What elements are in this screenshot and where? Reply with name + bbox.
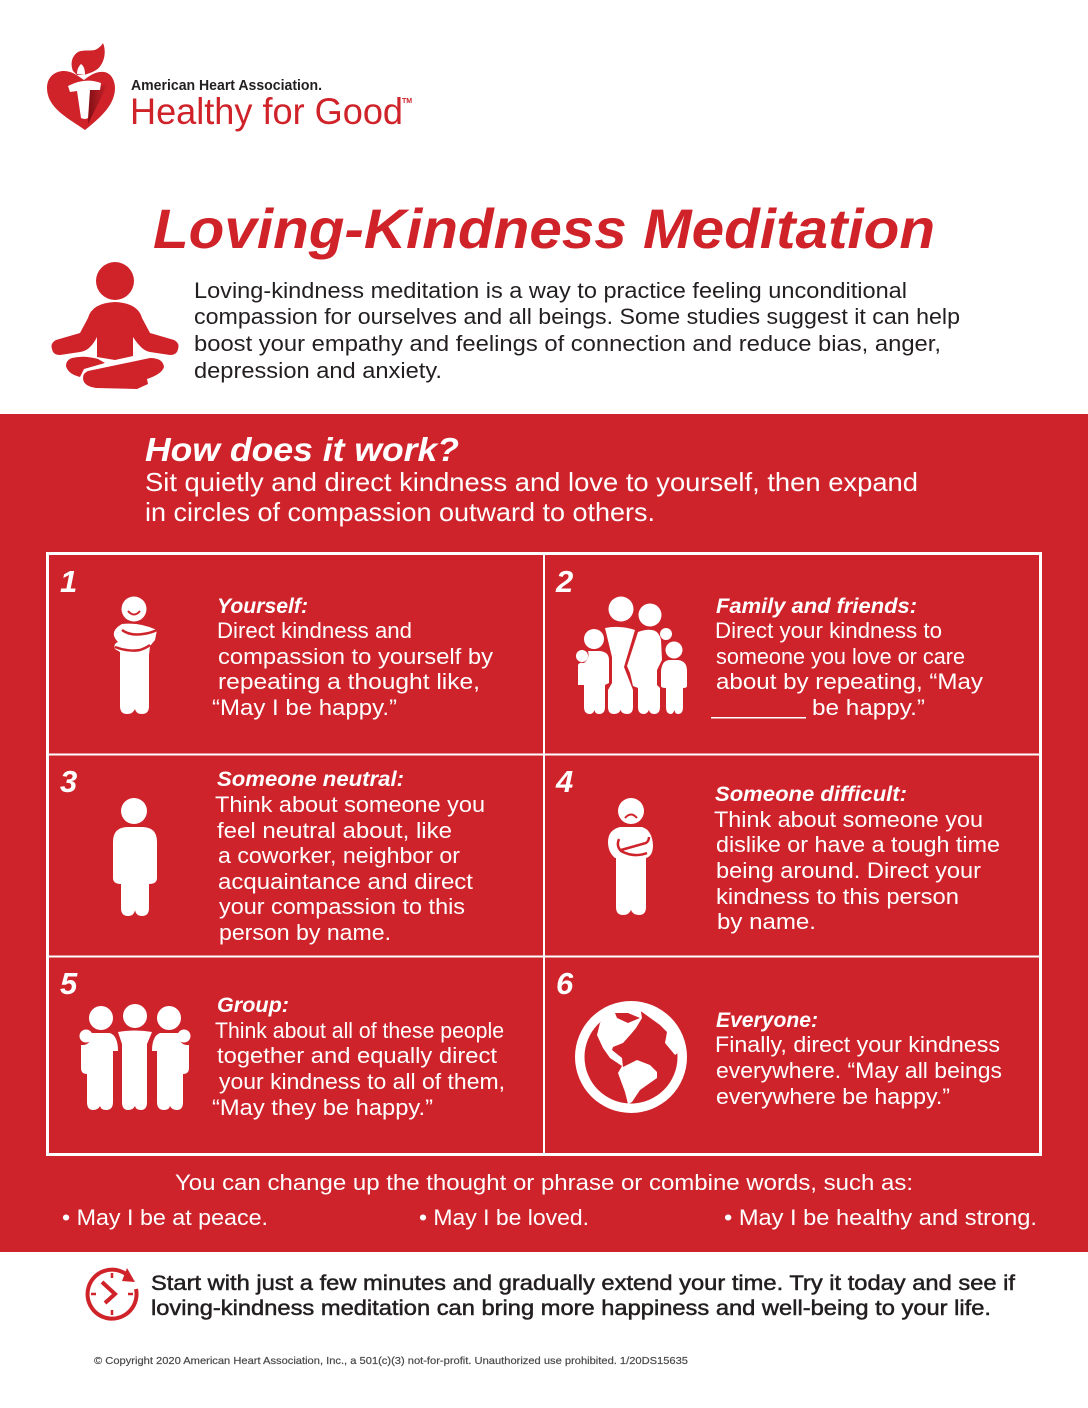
icon: group of three [80, 1004, 190, 1110]
closing text: loving-kindness meditation can bring more happiness and well-being to your life. [151, 1297, 991, 1320]
text: someone neutral: your compassion to this [219, 894, 465, 919]
text: everyone: Finally, direct your kindness [715, 1032, 1000, 1057]
text: someone difficult: by name. [717, 909, 816, 934]
subheading text: in circles of compassion outward to others. [145, 497, 655, 527]
text: change up the phrase: You can change up the thought or phrase or combine words, such as: [175, 1170, 913, 1195]
text: group: “May they be happy.” [212, 1095, 433, 1120]
closing text: Start with just a few minutes and gradually extend your time. Try it today and see if [151, 1272, 1015, 1295]
cell 1: yourself [60, 564, 493, 720]
text: Healthy for Good: Healthy for Good [130, 91, 403, 132]
text: family and friends: Direct your kindness to [715, 618, 942, 643]
intro text: depression and anxiety. [194, 358, 442, 383]
text: someone neutral: feel neutral about, like [217, 818, 452, 843]
icon: family [576, 596, 687, 714]
text: group: together and equally direct [217, 1043, 497, 1068]
text: trademark: TM [402, 98, 412, 105]
text: family and friends [711, 595, 983, 720]
text: someone difficult: dislike or have a tough time [716, 832, 1000, 857]
text: someone neutral: a coworker, neighbor or [218, 843, 460, 868]
title: Loving-Kindness Meditation [153, 197, 935, 260]
cell 3: someone neutral: 3 [60, 764, 77, 799]
cell 6: everyone [556, 966, 1002, 1113]
cell 1: yourself: 1 [60, 564, 77, 599]
text: yourself: compassion to yourself by [218, 644, 493, 669]
logo: American Heart Association Healthy for Good [47, 43, 412, 132]
text: American Heart Association: American Heart Association. [131, 78, 322, 94]
intro text: Loving-kindness meditation is a way to practice feeling unconditional [194, 278, 907, 303]
heading: how does it work: How does it work? [145, 431, 459, 468]
intro text [194, 278, 960, 383]
text: someone difficult: kindness to this person [716, 884, 959, 909]
cell 6: everyone: 6 [556, 966, 574, 1001]
text: everyone: everywhere. “May all beings [716, 1058, 1002, 1083]
icon: person with crossed arms [608, 798, 653, 915]
cell 3: someone neutral [60, 764, 485, 945]
icon: meditating person [52, 262, 178, 389]
text: someone difficult: Someone difficult: [715, 783, 907, 806]
icon: globe [575, 1001, 687, 1113]
text: someone difficult [714, 783, 1000, 934]
text: yourself: repeating a thought like, [218, 669, 480, 694]
subheading text [145, 467, 918, 527]
text: yourself: Yourself: [217, 595, 308, 618]
text: yourself: Direct kindness and [217, 618, 412, 643]
text: someone neutral: acquaintance and direct [218, 869, 473, 894]
text: someone neutral: person by name. [219, 920, 391, 945]
text: someone neutral: Think about someone you [215, 792, 485, 817]
icon: person hugging self [114, 596, 157, 714]
text: group: Group: [217, 994, 289, 1017]
text: someone difficult: Think about someone you [714, 807, 983, 832]
intro text: boost your empathy and feelings of connection and reduce bias, anger, [194, 331, 941, 356]
bullet: at peace: • May I be at peace. [62, 1205, 268, 1230]
icon: heart and torch [47, 43, 115, 130]
cell 4: someone difficult: 4 [555, 764, 573, 799]
text: group: your kindness to all of them, [219, 1069, 505, 1094]
text: family and friends: be happy.” [812, 695, 925, 720]
icon: neutral person [113, 798, 157, 916]
cell 2: family and friends [555, 564, 983, 720]
text: family and friends: about by repeating, “May [716, 669, 983, 694]
bullet: healthy and strong: • May I be healthy and strong. [724, 1205, 1037, 1230]
text: someone difficult: being around. Direct your [716, 858, 981, 883]
cell 4: someone difficult [555, 764, 1000, 934]
text: yourself: “May I be happy.” [212, 695, 397, 720]
text: family and friends: Family and friends: [716, 595, 917, 618]
icon: clock [88, 1268, 137, 1319]
text: group: Think about all of these people [215, 1018, 504, 1043]
text: group [212, 994, 505, 1120]
bullet: loved: • May I be loved. [419, 1205, 589, 1230]
subheading text: Sit quietly and direct kindness and love to yourself, then expand [145, 467, 918, 497]
text: everyone: everywhere be happy.” [716, 1084, 950, 1109]
cell 5: group: 5 [60, 966, 78, 1001]
text: everyone: Everyone: [716, 1009, 818, 1032]
cell 2: family and friends: 2 [555, 564, 573, 599]
panel: how does it work [0, 414, 1088, 1252]
text: family and friends: someone you love or care [716, 644, 965, 669]
text: yourself [212, 595, 493, 720]
copyright: © Copyright 2020 American Heart Association, Inc., a 501(c)(3) not-for-profit. Unauthorized use prohibited. 1/20DS15635 [94, 1355, 688, 1367]
cell 5: group [60, 966, 505, 1120]
text: everyone [715, 1009, 1002, 1109]
closing text [151, 1272, 1015, 1320]
text: someone neutral [215, 768, 485, 945]
intro text: compassion for ourselves and all beings. Some studies suggest it can help [194, 304, 960, 329]
text: someone neutral: Someone neutral: [217, 768, 404, 791]
